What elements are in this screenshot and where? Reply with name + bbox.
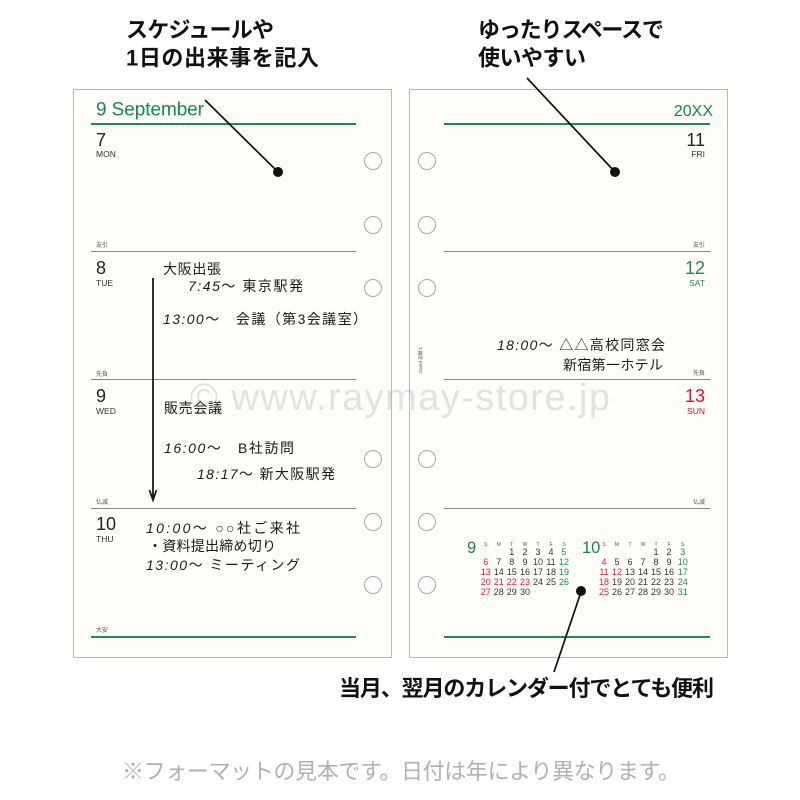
handwritten notes: Wednesday: 販売会議 — [164, 400, 222, 416]
handwritten notes: Wednesday: 16:00～ B社訪問 — [164, 440, 294, 456]
panel: right diary page — [410, 90, 728, 658]
mini calendar: October: 7 — [640, 557, 646, 567]
date: Saturday 12: SAT — [689, 278, 705, 288]
mini calendar: October: 15 — [651, 567, 661, 577]
mini calendar: September: S — [562, 542, 566, 548]
mini calendar: October: 30 — [664, 587, 674, 597]
date: Sunday 13: 仏滅 — [693, 498, 705, 506]
mini calendar: September: 10 — [533, 557, 543, 567]
watermark: © www.raymay-store.jp — [190, 377, 610, 419]
mini calendar: September: 22 — [507, 577, 517, 587]
mini calendar: September: 1 — [509, 547, 514, 557]
mini calendar: September: 23 — [520, 577, 530, 587]
mini calendar: October: 14 — [638, 567, 648, 577]
date: Wednesday 9 — [96, 386, 116, 506]
date: Saturday 12: 先負 — [693, 369, 705, 377]
mini calendar: October: 4 — [601, 557, 607, 567]
binder holes — [418, 152, 436, 594]
mini calendar: September: 26 — [559, 577, 569, 587]
mini calendar: September: 18 — [546, 567, 556, 577]
mini calendar: September: M — [497, 542, 501, 548]
date: Monday 7: 7 — [96, 130, 106, 150]
mini calendar: September: 19 — [559, 567, 569, 577]
callout heading: schedule: スケジュールや — [126, 18, 274, 42]
callout heading: roomy space: ゆったりスペースで — [478, 18, 664, 42]
mini calendar: September: 11 — [546, 557, 556, 567]
mini calendar: September: 21 — [494, 577, 504, 587]
handwritten notes: Wednesday: 18:17～ 新大阪駅発 — [197, 466, 335, 482]
mini calendar: September: 20 — [481, 577, 491, 587]
mini calendar: September: F — [549, 542, 553, 548]
date: Monday 7: MON — [96, 149, 116, 159]
mini calendar: September: 27 — [481, 587, 491, 597]
date: Friday 11 — [686, 130, 705, 249]
mini calendar: September: T — [536, 542, 540, 548]
mini calendar: September: 16 — [520, 567, 530, 577]
mini calendar: October: 3 — [680, 547, 685, 557]
date: Saturday 12: 12 — [685, 258, 705, 278]
date: Wednesday 9: WED — [96, 406, 116, 416]
callout pointer: roomy space — [527, 78, 620, 177]
mini calendar: September: T — [510, 542, 513, 548]
mini calendar: September: S — [484, 542, 488, 548]
date: Tuesday 8: 先負 — [96, 370, 108, 378]
date: Thursday 10: 大安 — [96, 626, 108, 634]
mini calendar: October: 26 — [612, 587, 622, 597]
mini calendar: October: 6 — [627, 557, 633, 567]
mini calendar: September: 28 — [494, 587, 504, 597]
mini calendar: October: 10 — [582, 539, 600, 557]
handwritten notes: Saturday: 18:00～ △△高校同窓会 — [497, 337, 665, 353]
mini calendar: September: 4 — [548, 547, 554, 557]
panel: left diary page — [74, 90, 392, 658]
mini calendar: September: W — [523, 542, 528, 548]
handwritten notes: Tuesday: 7:45～ 東京駅発 — [188, 278, 303, 294]
date: Friday 11: 友引 — [693, 241, 705, 249]
mini calendar: October: 19 — [612, 577, 622, 587]
date: Tuesday 8 — [96, 258, 113, 378]
mini calendar: September: 9 — [522, 557, 528, 567]
mini calendar: September: 9 — [467, 539, 476, 557]
handwritten notes: Saturday: 新宿第一ホテル — [563, 357, 663, 373]
date: Thursday 10: THU — [96, 534, 113, 544]
handwritten notes: Wednesday — [164, 400, 335, 482]
mini calendar: October: 28 — [638, 587, 648, 597]
handwritten notes: Thursday: 10:00～ ○○社ご来社 — [146, 520, 300, 536]
date: Friday 11: FRI — [691, 149, 705, 159]
date: Tuesday 8: 8 — [96, 258, 106, 278]
mini calendar: September: 24 — [533, 577, 543, 587]
date: Monday 7 — [96, 130, 116, 249]
handwritten notes: Thursday — [146, 520, 300, 573]
mini calendar: September: 8 — [509, 557, 514, 567]
heading: year: 20XX — [674, 103, 713, 120]
mini calendar: October: 2 — [666, 547, 672, 557]
mini calendar: October: 20 — [625, 577, 635, 587]
mini calendar: September: 15 — [507, 567, 517, 577]
date: Thursday 10 — [96, 514, 116, 634]
date: Sunday 13: SUN — [687, 406, 705, 416]
arrow: continuous schedule across days — [150, 278, 156, 500]
handwritten notes: Tuesday: 大阪出張 — [163, 261, 221, 277]
handwritten notes: Tuesday — [163, 261, 367, 327]
mini calendar: October: S — [602, 542, 606, 548]
mini calendar: October: 24 — [678, 577, 688, 587]
date: Sunday 13: 13 — [685, 386, 705, 406]
callout heading: roomy space: 使いやすい — [478, 46, 586, 70]
mini calendar: October: 18 — [599, 577, 609, 587]
callout heading: schedule — [126, 18, 319, 70]
mini calendar: October: 10 — [678, 557, 688, 567]
mini calendar: October: 31 — [678, 587, 688, 597]
product code: Dated 週間:1 — [417, 346, 424, 373]
mini calendar: October: 8 — [653, 557, 659, 567]
mini calendar: September: 5 — [561, 547, 567, 557]
callout heading: roomy space — [478, 18, 664, 70]
date: Tuesday 8: TUE — [96, 278, 113, 288]
mini calendar: October: F — [667, 542, 671, 548]
mini calendar: October: S — [681, 542, 685, 548]
mini calendar: October: T — [654, 542, 658, 548]
date: Monday 7: 友引 — [96, 241, 108, 249]
mini calendar: September: 12 — [559, 557, 569, 567]
callout pointer: schedule — [205, 100, 283, 177]
handwritten notes: Thursday: ・資料提出締め切り — [148, 538, 276, 554]
mini calendar: October: 21 — [638, 577, 648, 587]
mini calendar: October: 17 — [678, 567, 688, 577]
heading: month: 9 September — [96, 100, 205, 120]
mini calendar: September: 17 — [533, 567, 543, 577]
mini calendar: September: 29 — [507, 587, 517, 597]
mini calendar: September: 25 — [546, 577, 556, 587]
footnote: ※フォーマットの見本です。日付は年により異なります。 — [122, 759, 680, 784]
date: Wednesday 9: 9 — [96, 386, 106, 406]
mini calendar: September: 6 — [483, 557, 488, 567]
date: Sunday 13 — [685, 386, 705, 506]
mini calendar: October: W — [641, 542, 646, 548]
callout heading: schedule: 1日の出来事を記入 — [126, 46, 319, 70]
binder holes — [364, 152, 382, 594]
mini calendar: October: 5 — [614, 557, 620, 567]
mini calendar: October: 27 — [625, 587, 635, 597]
mini calendar: September: 3 — [535, 547, 541, 557]
callout pointer: calendar — [554, 586, 586, 672]
mini calendar: October: T — [628, 542, 632, 548]
mini calendar: October: 23 — [664, 577, 674, 587]
mini calendar: October: 9 — [666, 557, 672, 567]
mini calendar: September: 14 — [494, 567, 504, 577]
handwritten notes: Thursday: 13:00～ ミーティング — [146, 557, 300, 573]
mini calendar: October: 1 — [653, 547, 659, 557]
mini calendar: September: 2 — [522, 547, 528, 557]
mini calendar: October — [582, 539, 688, 597]
mini calendar: October: 25 — [599, 587, 609, 597]
mini calendar: October: 22 — [651, 577, 661, 587]
mini calendar: September: 13 — [481, 567, 491, 577]
mini calendar: October: 12 — [612, 567, 622, 577]
mini calendar: October: 13 — [625, 567, 635, 577]
mini calendar: October: 29 — [651, 587, 661, 597]
mini calendar: October: 16 — [664, 567, 674, 577]
mini calendar: October: M — [615, 542, 619, 548]
mini calendar: September: 7 — [496, 557, 501, 567]
handwritten notes: Tuesday: 13:00～ 会議（第3会議室） — [163, 311, 367, 327]
date: Wednesday 9: 仏滅 — [96, 498, 108, 506]
callout heading: calendar: 当月、翌月のカレンダー付でとても便利 — [339, 676, 714, 701]
date: Saturday 12 — [685, 258, 705, 377]
date: Thursday 10: 10 — [96, 514, 116, 534]
mini calendar: September: 30 — [520, 587, 530, 597]
handwritten notes: Saturday — [497, 337, 665, 373]
mini calendar: September — [467, 539, 569, 597]
date: Friday 11: 11 — [686, 130, 705, 150]
mini calendar: October: 11 — [599, 567, 609, 577]
